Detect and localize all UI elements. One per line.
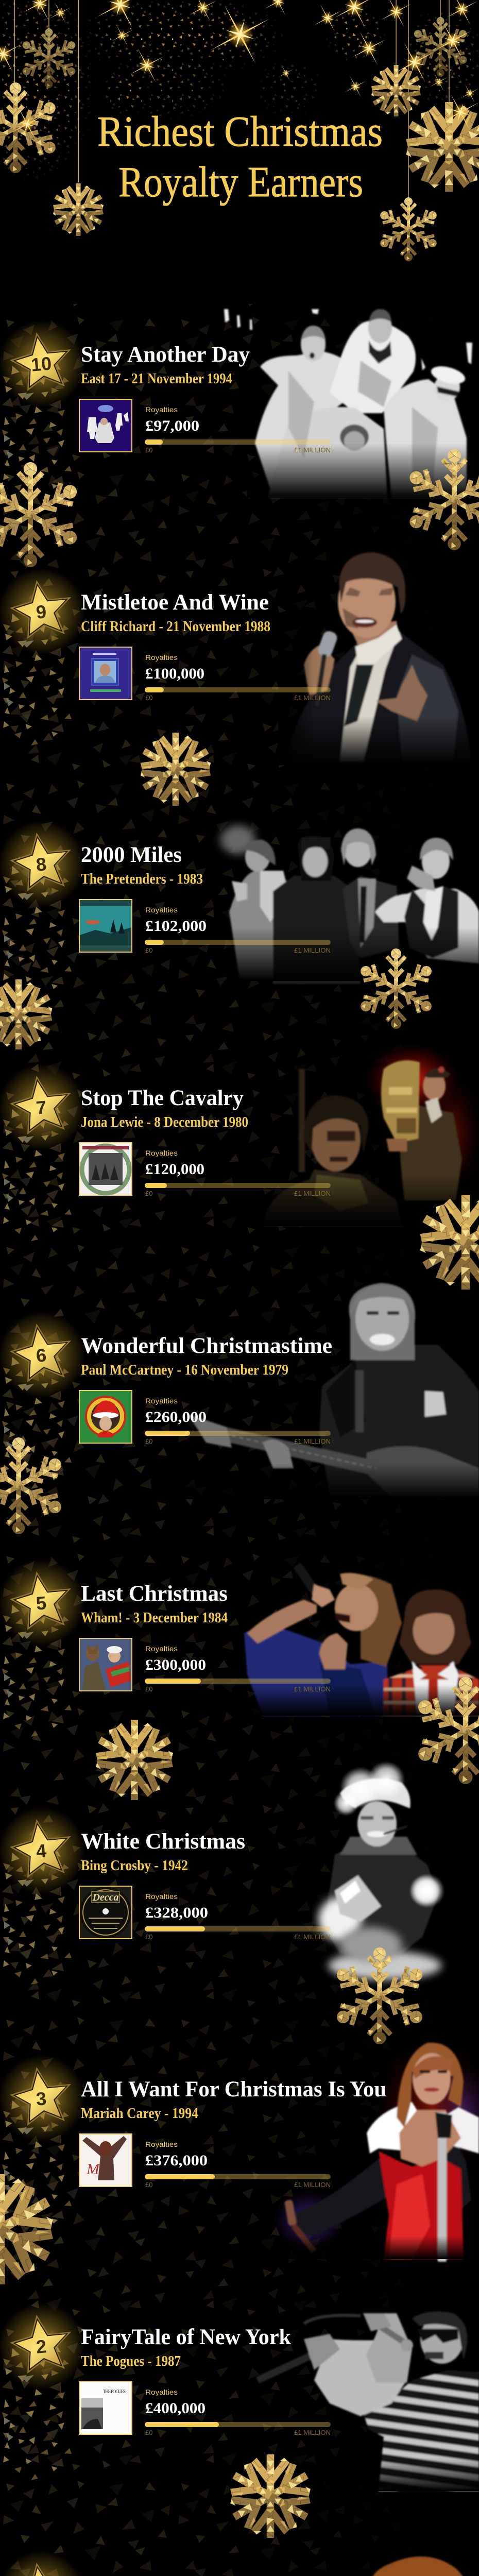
royalties bar: £1 MILLION (294, 2181, 331, 2189)
artist and date: Bing Crosby - 1942 (81, 1858, 188, 1874)
royalties label: Royalties (145, 405, 178, 414)
artist and date: Mariah Carey - 1994 (81, 2106, 198, 2122)
album cover (79, 1886, 132, 1939)
royalties amount: £260,000 (145, 1409, 207, 1426)
song title: Stay Another Day (81, 343, 250, 367)
royalties label: Royalties (145, 906, 178, 914)
album cover (79, 1391, 132, 1443)
section 9: Mistletoe And Wine (0, 568, 331, 702)
section 3: All I Want For Christmas Is You (0, 2055, 386, 2189)
song title: Wonderful Christmastime (81, 1334, 332, 1358)
section 8: 2000 Miles (0, 820, 331, 954)
album cover (79, 399, 132, 452)
photo: East 17 (224, 309, 479, 498)
album cover: M (86, 2161, 100, 2178)
title: Richest Christmas (97, 108, 383, 156)
artist and date: Cliff Richard - 21 November 1988 (81, 619, 270, 635)
photo: Paul McCartney (185, 1283, 479, 1499)
rank star 6 (0, 1311, 85, 1399)
royalties bar: £1 MILLION (294, 694, 331, 702)
album cover (79, 1638, 132, 1691)
album cover (79, 2134, 132, 2187)
rank star 9 (0, 568, 85, 655)
rank star 8 (0, 820, 85, 908)
royalties label: Royalties (145, 1397, 178, 1405)
song title: Last Christmas (81, 1582, 228, 1606)
royalties amount: £328,000 (145, 1904, 208, 1921)
royalties bar: £0 (145, 446, 152, 454)
royalties bar (145, 1431, 331, 1445)
album cover (79, 900, 132, 952)
royalties amount: £120,000 (145, 1161, 204, 1178)
header hanging ornaments (0, 0, 479, 261)
rank star 1 (0, 2550, 85, 2576)
artist and date: The Pogues - 1987 (81, 2353, 181, 2369)
song title: All I Want For Christmas Is You (81, 2077, 386, 2102)
song title: 2000 Miles (81, 843, 182, 867)
section 5: Last Christmas (0, 1559, 331, 1693)
song title: Mistletoe And Wine (81, 590, 269, 615)
song title: White Christmas (81, 1829, 245, 1854)
royalties bar (145, 687, 331, 702)
royalties amount: £97,000 (145, 417, 199, 434)
royalties bar: £1 MILLION (294, 1933, 331, 1941)
photo: The Pretenders (220, 825, 479, 984)
artist and date: East 17 - 21 November 1994 (81, 371, 232, 387)
rank star 7: 7 (35, 1096, 47, 1118)
royalties bar (145, 2422, 331, 2436)
royalties label: Royalties (145, 1892, 178, 1901)
royalties amount: £400,000 (145, 2400, 206, 2417)
photo: Wham! (242, 1563, 479, 1716)
rank star 3 (0, 2055, 85, 2142)
rank star 5: 5 (35, 1592, 47, 1614)
rank star 7 (0, 1063, 85, 1151)
album cover (79, 647, 132, 700)
rank star 10: 10 (30, 352, 53, 376)
section 2: FairyTale of New York (0, 2302, 331, 2436)
royalties bar (145, 2174, 331, 2189)
album cover: Decca (92, 1892, 119, 1903)
royalties bar (145, 1926, 331, 1941)
royalties bar: £0 (145, 2429, 152, 2436)
section 1: Merry Christmas Everybody (0, 2550, 359, 2576)
royalties amount: £300,000 (145, 1656, 206, 1673)
photo: Bing Crosby (318, 1761, 444, 1980)
royalties bar: £0 (145, 946, 152, 954)
rank star 8: 8 (35, 853, 47, 875)
rank star 10 (0, 320, 85, 408)
title: Royalty Earners (118, 158, 363, 206)
royalties bar: £0 (145, 1190, 152, 1197)
section 6: Wonderful Christmastime (0, 1311, 332, 1445)
rank star 4 (0, 1807, 85, 1894)
section 7: Stop The Cavalry (0, 1063, 331, 1197)
section 10: Stay Another Day (0, 320, 331, 454)
rank star 6: 6 (35, 1344, 47, 1366)
royalties label: Royalties (145, 653, 178, 662)
royalties label: Royalties (145, 2388, 178, 2396)
royalties bar: £0 (145, 1933, 152, 1941)
royalties bar: £1 MILLION (294, 946, 331, 954)
photo: Mariah Carey (273, 2040, 479, 2262)
triangle confetti field (3, 304, 374, 2576)
photo: Jona Lewie (258, 1043, 479, 1226)
confetti clusters beside the stars (2, 352, 72, 2576)
royalties label: Royalties (145, 1645, 178, 1653)
rank star 9: 9 (35, 601, 47, 623)
royalties amount: £102,000 (145, 918, 207, 935)
artist and date: Wham! - 3 December 1984 (81, 1610, 228, 1626)
rank star 3: 3 (35, 2088, 47, 2110)
royalties label: Royalties (145, 2140, 178, 2148)
royalties bar: £1 MILLION (294, 2429, 331, 2436)
rank star 2: 2 (35, 2335, 47, 2358)
royalties bar: £1 MILLION (294, 1685, 331, 1693)
artist and date: Paul McCartney - 16 November 1979 (81, 1362, 288, 1378)
royalties bar: £1 MILLION (294, 1190, 331, 1197)
rank star 4: 4 (35, 1840, 47, 1862)
title (97, 108, 383, 206)
royalties bar: £1 MILLION (294, 446, 331, 454)
royalties label: Royalties (145, 1149, 178, 1157)
artist and date: The Pretenders - 1983 (81, 871, 203, 887)
photo: Cliff Richard (278, 552, 479, 765)
photo: Slade (232, 2556, 479, 2576)
glitter behind header (2, 1, 479, 180)
artist and date: Jona Lewie - 8 December 1980 (81, 1114, 248, 1130)
song title: FairyTale of New York (81, 2325, 291, 2349)
royalties bar: £0 (145, 1685, 152, 1693)
rank star 5 (0, 1559, 85, 1647)
royalties bar (145, 940, 331, 954)
royalties amount: £100,000 (145, 665, 204, 682)
royalties bar: £0 (145, 1437, 152, 1445)
royalties bar (145, 1183, 331, 1197)
album cover (79, 1143, 132, 1195)
album cover (79, 2382, 132, 2434)
royalties bar (145, 439, 331, 454)
royalties bar: £1 MILLION (294, 1437, 331, 1445)
royalties amount: £376,000 (145, 2152, 208, 2169)
royalties bar: £0 (145, 2181, 152, 2189)
rank star 2 (0, 2302, 85, 2390)
royalties bar (145, 1679, 331, 1693)
song title: Stop The Cavalry (81, 1086, 244, 1110)
photo: The Pogues (258, 2312, 479, 2491)
royalties bar: £0 (145, 694, 152, 702)
album cover: THE POGUES (103, 2389, 126, 2394)
section 4: White Christmas (0, 1807, 331, 1941)
header sparkles (0, 0, 479, 150)
